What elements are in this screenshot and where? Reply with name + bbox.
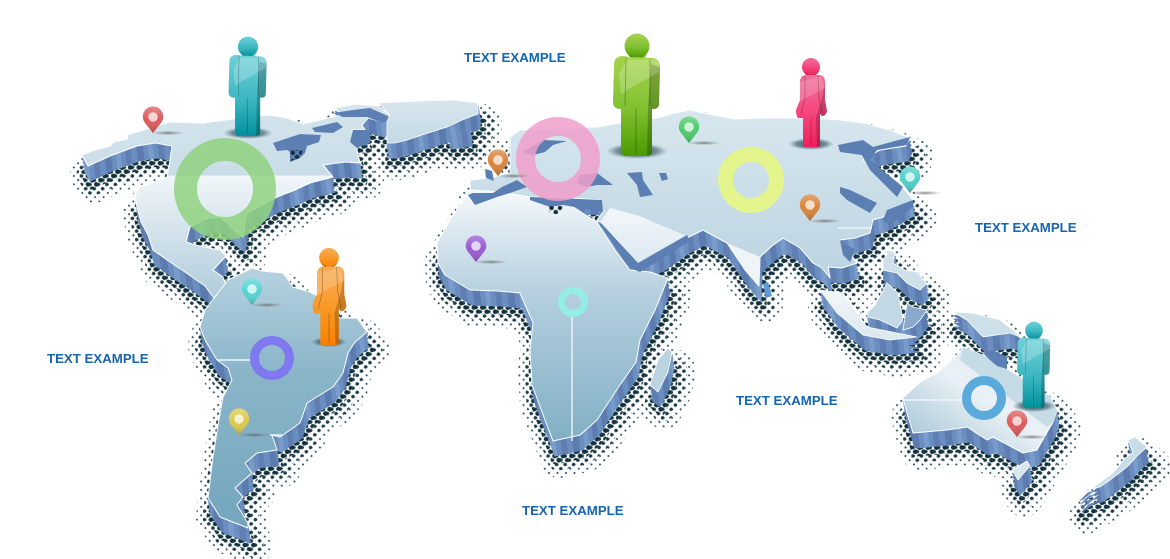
ring: blue australia (966, 380, 1002, 416)
pin: teal east asia (900, 166, 942, 195)
ring: pink europe (526, 126, 590, 192)
continent: australia (903, 347, 1057, 453)
pin: teal south america (242, 278, 284, 307)
white guide lines (217, 228, 963, 441)
landmass extruded sides (82, 104, 1149, 543)
ring: purple south america (254, 340, 290, 376)
person: teal man australia (1012, 322, 1056, 412)
continent: south america (200, 268, 367, 528)
label: east: TEXT EXAMPLE (975, 220, 1077, 235)
inland seas and coast cuts (468, 137, 913, 298)
person: pink woman asia (788, 58, 834, 150)
gulf of carpentaria (983, 350, 1007, 369)
label: indian ocean: TEXT EXAMPLE (736, 393, 838, 408)
madagascar (650, 348, 672, 392)
halftone patch in the mediterranean (547, 206, 563, 214)
ring: green north america (186, 150, 264, 228)
pin: red australia (1007, 410, 1049, 439)
pin: green russia (679, 116, 721, 145)
person: teal man north america (223, 37, 273, 139)
hudson bay and arctic channels (273, 108, 390, 162)
label: bottom: TEXT EXAMPLE (522, 503, 624, 518)
southeast asia islands (820, 250, 927, 340)
ring: yellow asia (726, 154, 776, 206)
label: top: TEXT EXAMPLE (464, 50, 566, 65)
halftone shadow (85, 119, 1153, 547)
continent: africa (437, 190, 668, 441)
pin: purple africa (466, 235, 508, 264)
pin: orange asia (800, 194, 842, 223)
pin: orange europe (488, 149, 530, 178)
ring: aqua africa (562, 290, 584, 314)
australia north-east shading (960, 347, 1057, 427)
label: west: TEXT EXAMPLE (47, 351, 149, 366)
continent: greenland (378, 100, 478, 143)
person: green man europe (606, 34, 668, 159)
new guinea, tasmania and new zealand (953, 312, 1147, 497)
pin: red north america (143, 106, 185, 135)
pin: yellow south america (229, 408, 271, 437)
continent: eurasia (470, 110, 913, 286)
continent: north america (82, 104, 390, 298)
person: orange woman south america (311, 248, 347, 347)
arabia and india highlight (600, 208, 687, 263)
